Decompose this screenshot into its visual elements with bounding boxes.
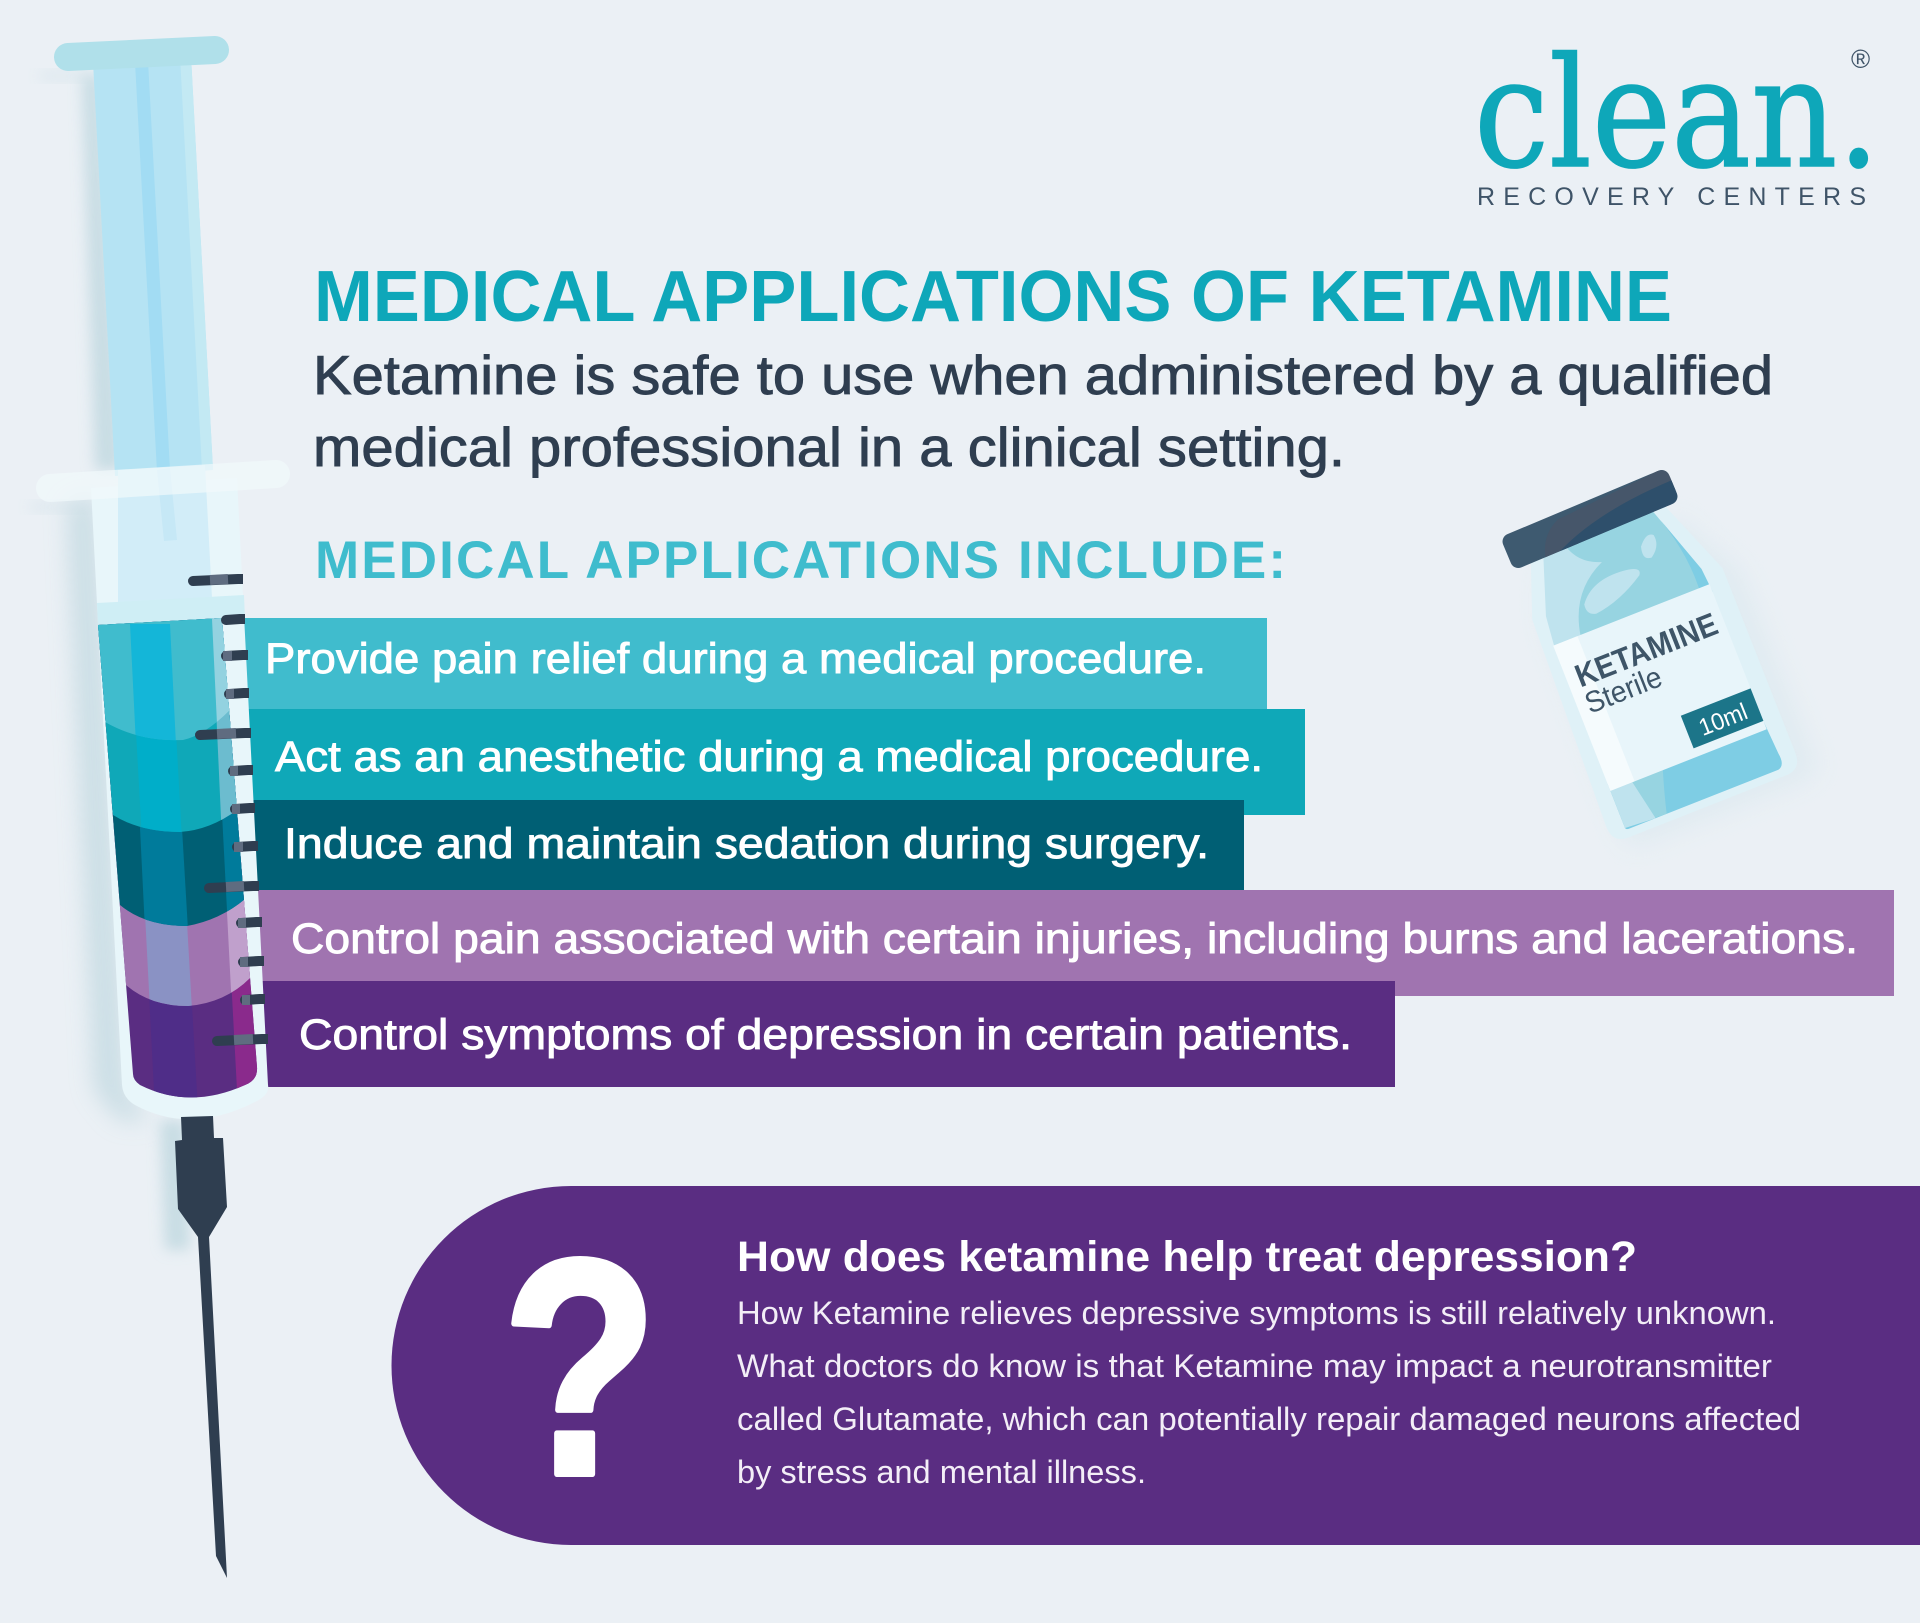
bar: anesthetic: Act as an anesthetic during a medical procedure. bbox=[275, 733, 1263, 781]
flange bbox=[50, 474, 276, 488]
callout body: How Ketamine relieves depressive symptoms is still relatively unknown. bbox=[737, 1295, 1776, 1331]
title: MEDICAL APPLICATIONS OF KETAMINE bbox=[314, 257, 1672, 337]
subtitle: Ketamine is safe to use when administered by a qualified bbox=[313, 344, 1773, 406]
bar: sedation bbox=[230, 800, 1244, 890]
subtitle: medical professional in a clinical setting. bbox=[313, 416, 1345, 478]
vial cap bbox=[1500, 468, 1680, 570]
layer: dark teal bbox=[98, 618, 244, 926]
callout body: What doctors do know is that Ketamine may impact a neurotransmitter bbox=[737, 1348, 1772, 1384]
bar: sedation: Induce and maintain sedation during surgery. bbox=[284, 820, 1209, 868]
question mark icon: ? bbox=[502, 1196, 658, 1540]
syringe shadows bbox=[30, 72, 190, 1250]
layer: teal bbox=[98, 618, 236, 832]
vial shadow bbox=[1521, 505, 1821, 851]
plunger rod bbox=[93, 56, 213, 476]
logo: ® bbox=[1851, 44, 1870, 74]
bar: depression: Control symptoms of depression in certain patients. bbox=[299, 1011, 1352, 1059]
layer: lilac bbox=[98, 618, 250, 1006]
callout body bbox=[737, 1295, 1801, 1490]
vial glass bbox=[1504, 492, 1802, 844]
vial label: Sterile bbox=[1580, 661, 1667, 721]
layer: light teal bbox=[98, 618, 230, 740]
bar: anesthetic bbox=[230, 709, 1305, 815]
vial label bbox=[1553, 584, 1767, 791]
subtitle bbox=[313, 344, 1773, 478]
callout: ketamine and depression bbox=[391, 1186, 1920, 1545]
bar: pain relief bbox=[230, 618, 1267, 709]
barrel bbox=[91, 465, 268, 1119]
needle bbox=[175, 1116, 227, 1578]
layer: purple bbox=[98, 618, 258, 1098]
syringe bbox=[30, 50, 280, 1578]
callout heading: How does ketamine help treat depression? bbox=[737, 1233, 1637, 1281]
logo: RECOVERY CENTERS bbox=[1477, 183, 1866, 211]
bar: injuries bbox=[240, 890, 1894, 996]
liquid layers bbox=[98, 618, 258, 1098]
callout body: called Glutamate, which can potentially repair damaged neurons affected bbox=[737, 1401, 1801, 1437]
bar: injuries: Control pain associated with certain injuries, including burns and lacerations. bbox=[291, 915, 1858, 963]
ketamine vial bbox=[1500, 468, 1821, 855]
bar: pain relief: Provide pain relief during a medical procedure. bbox=[265, 635, 1206, 683]
bar: depression bbox=[240, 981, 1395, 1087]
callout body: by stress and mental illness. bbox=[737, 1454, 1146, 1490]
application bars bbox=[230, 618, 1894, 1087]
plunger cap bbox=[68, 50, 215, 57]
vial body bbox=[1504, 486, 1821, 855]
section heading: MEDICAL APPLICATIONS INCLUDE: bbox=[315, 531, 1286, 590]
syringe tick marks bbox=[193, 579, 268, 1041]
vial contents bbox=[1521, 501, 1784, 830]
vial label: 10ml bbox=[1695, 698, 1752, 742]
vial label: KETAMINE bbox=[1570, 606, 1723, 694]
